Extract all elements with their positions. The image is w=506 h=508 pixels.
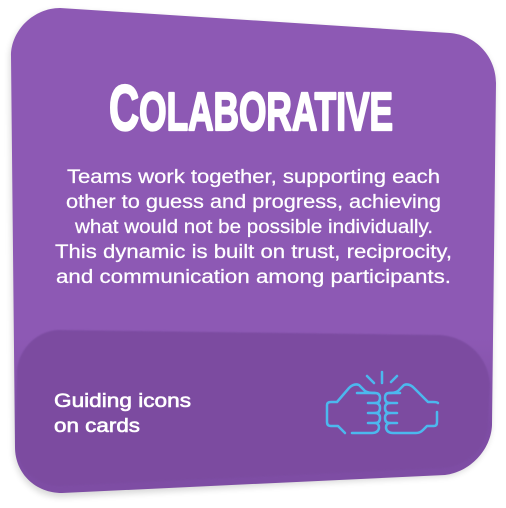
footer label: Guiding icons xyxy=(54,390,191,412)
description text: what would not be possible individually. xyxy=(74,216,433,238)
description text xyxy=(55,166,452,288)
footer panel: on cards xyxy=(54,415,140,437)
description text: Teams work together, supporting each xyxy=(67,166,440,188)
description text: This dynamic is built on trust, reciprocity, xyxy=(55,241,452,263)
description text: and communication among participants. xyxy=(56,266,451,288)
icon: fist bump xyxy=(327,372,438,433)
description text: other to guess and progress, achieving xyxy=(66,191,441,213)
footer panel xyxy=(16,330,490,486)
